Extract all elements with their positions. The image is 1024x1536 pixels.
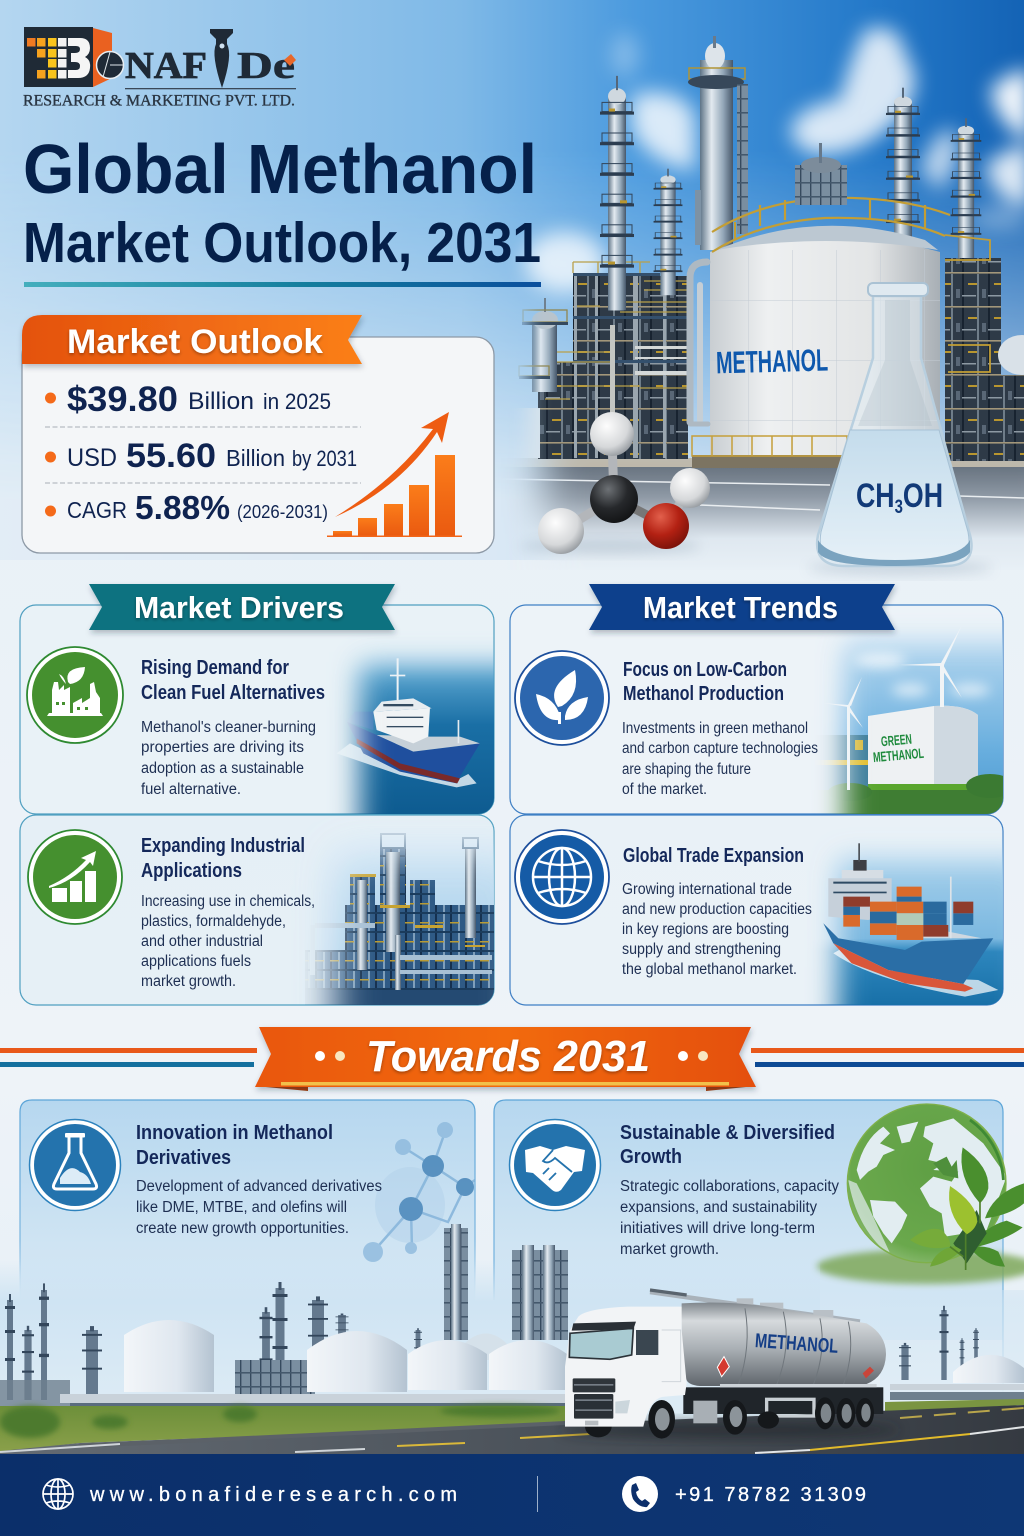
grass verge	[0, 1399, 1024, 1452]
cab	[565, 1307, 687, 1427]
ground and road	[516, 458, 1024, 560]
card text: sustainable growth: expansions, and sustainability	[620, 1199, 817, 1216]
card text: sustainable growth: Growth	[620, 1146, 682, 1168]
card text: industrial applications: Applications	[141, 860, 242, 882]
card text: clean fuel: Clean Fuel Alternatives	[141, 682, 325, 704]
card text: trade expansion: Growing international trade	[622, 881, 792, 898]
image: tanker ship	[337, 644, 494, 814]
icon: phone	[622, 1476, 658, 1512]
card text: low-carbon: Investments in green methanol	[622, 720, 808, 737]
card text: sustainable growth: Strategic collaborations, capacity	[620, 1178, 839, 1195]
stat: CAGR	[45, 489, 328, 526]
flask formula: OH	[903, 477, 943, 515]
website: www.bonafideresearch.com	[89, 1484, 457, 1506]
card text: derivatives: Innovation in Methanol	[136, 1122, 333, 1144]
card text: trade expansion: and new production capacities	[622, 901, 812, 918]
bottom refinery scene	[0, 1224, 1024, 1454]
ribbon: towards 2031: Towards 2031	[366, 1032, 650, 1081]
flask formula: CH	[856, 477, 905, 515]
card text: low-carbon: Focus on Low-Carbon	[623, 659, 787, 681]
stat: CAGR: CAGR	[67, 497, 127, 523]
tower B	[654, 169, 682, 295]
title: Global Methanol	[23, 130, 537, 208]
molecule network	[363, 1122, 475, 1262]
tank base railing	[692, 436, 847, 468]
hazard labels	[717, 1357, 729, 1377]
ribbon: market trends	[589, 584, 895, 630]
title: Market Outlook, 2031	[23, 211, 541, 275]
far right dome	[998, 335, 1024, 375]
ribbon: market drivers	[89, 584, 395, 630]
panel: market drivers	[20, 584, 500, 1005]
tower A	[600, 76, 634, 310]
card text: derivatives: create new growth opportunities.	[136, 1220, 349, 1237]
logo: NAF	[125, 45, 207, 87]
hero sky	[0, 0, 1024, 560]
undercarriage	[683, 1387, 883, 1414]
card: industrial applications	[20, 815, 495, 1005]
card text: sustainable growth: initiatives will drive long-term	[620, 1220, 815, 1237]
stat: 2025 value: $39.80	[67, 380, 178, 419]
card text: clean fuel: properties are driving its	[141, 739, 304, 756]
card text: clean fuel: Rising Demand for	[141, 657, 289, 679]
tall column	[444, 1224, 468, 1340]
icon: flask	[30, 1120, 120, 1210]
card text: trade expansion: the global methanol market.	[622, 961, 797, 978]
card text: sustainable growth: market growth.	[620, 1241, 719, 1258]
right towers	[886, 88, 920, 253]
title	[23, 130, 541, 275]
image: container ship	[815, 840, 1003, 1005]
card text: industrial applications: and other industrial	[141, 933, 263, 950]
stat: 2031 value: by 2031	[292, 446, 357, 471]
ribbon: towards 2031	[255, 1027, 756, 1091]
ribbon: market outlook: Market Outlook	[67, 323, 323, 361]
road	[0, 1405, 1024, 1454]
card text: industrial applications	[141, 835, 315, 990]
road shadow	[560, 1421, 900, 1439]
stat: 2031 value: Billion	[226, 445, 285, 471]
stat: 2031 value: USD	[67, 444, 117, 472]
card: trade expansion	[510, 815, 1004, 1005]
stat: 2025 value: in 2025	[263, 389, 331, 414]
title rule	[24, 282, 541, 287]
stat: CAGR: (2026-2031)	[237, 502, 328, 522]
ribbon: market outlook	[22, 315, 362, 364]
flask formula: 3	[895, 497, 903, 518]
card: low-carbon	[510, 600, 1014, 815]
pipelines	[0, 1380, 1024, 1410]
card text: clean fuel: fuel alternative.	[141, 781, 241, 798]
small column	[519, 298, 568, 392]
phone number: +91 78782 31309	[675, 1484, 866, 1506]
image: green methanol plant	[822, 620, 1003, 814]
logo: De	[237, 45, 295, 87]
image: green methanol plant: GREEN	[880, 731, 912, 749]
twin columns	[512, 1245, 568, 1340]
card text: low-carbon: are shaping the future	[622, 761, 751, 778]
card text: industrial applications: applications fuels	[141, 953, 251, 970]
tanker barrel	[681, 1302, 886, 1386]
stat: 2025 value	[45, 380, 331, 419]
distant towers	[5, 1282, 979, 1400]
card text: industrial applications: market growth.	[141, 973, 236, 990]
tanker top rail	[650, 1290, 860, 1322]
card text: sustainable growth	[620, 1122, 839, 1258]
glass flask	[808, 283, 992, 575]
card text: clean fuel: adoption as a sustainable	[141, 760, 304, 777]
card text: trade expansion: in key regions are boosting	[622, 921, 789, 938]
image: green methanol plant: METHANOL	[872, 745, 925, 765]
card text: industrial applications: Expanding Industrial	[141, 835, 305, 857]
tanker label: METHANOL	[754, 1330, 839, 1358]
card: clean fuel	[20, 605, 500, 820]
stat: 2031 value	[45, 437, 357, 475]
icon: handshake	[510, 1120, 600, 1210]
icon: leaves	[515, 651, 609, 745]
card text: trade expansion	[622, 845, 812, 978]
left refinery block	[500, 262, 688, 459]
card text: low-carbon	[622, 659, 818, 798]
card: sustainable growth	[493, 1099, 1024, 1357]
ribbon: market drivers: Market Drivers	[134, 590, 344, 625]
card text: derivatives: Development of advanced derivatives	[136, 1178, 382, 1195]
card text: derivatives: like DME, MTBE, and olefins will	[136, 1199, 347, 1216]
storage tank	[710, 143, 950, 458]
right structure	[945, 235, 1024, 461]
main column	[688, 36, 748, 250]
card text: trade expansion: Global Trade Expansion	[623, 845, 804, 867]
card: derivatives	[20, 1100, 475, 1340]
image: refinery	[305, 822, 494, 1005]
storage tanks	[124, 1320, 1024, 1392]
pipework block	[235, 1360, 315, 1395]
stat: 2025 value: Billion	[188, 388, 254, 415]
card text: clean fuel: Methanol's cleaner-burning	[141, 719, 316, 736]
icon: globe	[515, 830, 609, 924]
truck grille	[573, 1378, 630, 1425]
growth bar chart	[327, 412, 462, 537]
card text: low-carbon: Methanol Production	[623, 683, 784, 705]
far right tower	[951, 118, 981, 261]
section divider lines	[0, 1048, 1024, 1067]
card text: low-carbon: of the market.	[622, 781, 707, 798]
panel: market outlook	[22, 315, 494, 553]
icon: web globe	[43, 1479, 73, 1509]
tank label: METHANOL	[716, 342, 828, 380]
molecule model	[520, 412, 710, 554]
logo: RESEARCH & MARKETING PVT. LTD.	[23, 92, 295, 110]
vertical pipes	[690, 262, 708, 424]
card text: industrial applications: plastics, formaldehyde,	[141, 913, 286, 930]
wheels	[585, 1397, 874, 1439]
footer	[0, 1454, 1024, 1536]
stat: 2031 value: 55.60	[126, 437, 216, 475]
icon: eco factory	[27, 647, 123, 743]
card text: low-carbon: and carbon capture technologies	[622, 740, 818, 757]
card text: derivatives: Derivatives	[136, 1147, 231, 1169]
chassis	[720, 1384, 877, 1387]
logo	[23, 27, 296, 110]
ribbon: market trends: Market Trends	[643, 590, 838, 625]
globe with leaves	[817, 1104, 1024, 1284]
stat: CAGR: 5.88%	[135, 489, 230, 526]
tanker truck	[565, 1290, 886, 1439]
card text: trade expansion: supply and strengthening	[622, 941, 781, 958]
panel: market trends	[510, 584, 1014, 1005]
card text: derivatives	[136, 1122, 382, 1237]
card text: clean fuel	[141, 657, 325, 798]
clouds	[525, 28, 1024, 292]
main plant scene	[470, 36, 1024, 570]
card text: industrial applications: Increasing use in chemicals,	[141, 893, 315, 910]
card text: sustainable growth: Sustainable & Diversified	[620, 1122, 835, 1144]
icon: growth chart	[28, 830, 122, 924]
